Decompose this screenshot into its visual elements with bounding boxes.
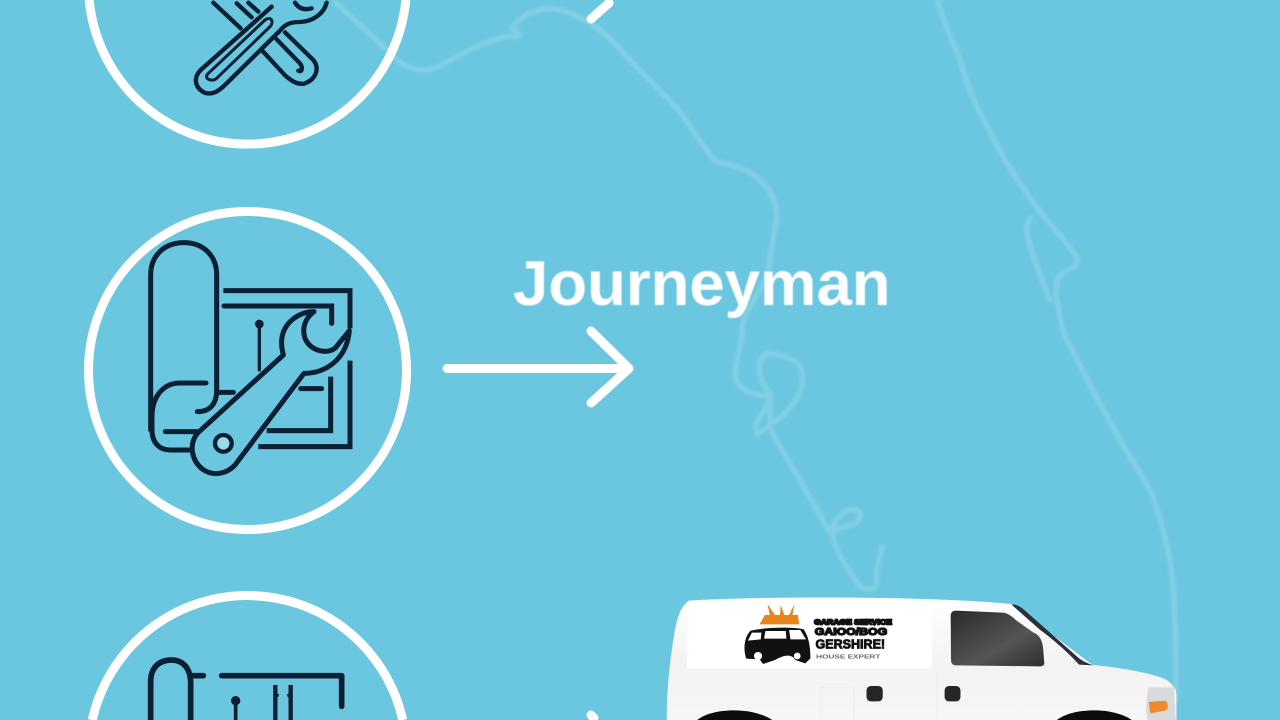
logo panel xyxy=(687,606,932,668)
windshield strip xyxy=(1012,605,1093,665)
door handles xyxy=(867,686,883,701)
circle ring xyxy=(88,212,406,530)
van body xyxy=(667,597,1176,720)
arrow: top stage xyxy=(591,3,609,19)
side window xyxy=(951,611,1044,666)
icon: crossed wrench and screwdriver xyxy=(196,3,327,93)
wrench xyxy=(192,312,349,474)
map outline: faint state border xyxy=(335,2,1176,700)
circle ring xyxy=(89,0,406,144)
logo text: GERSHIRE! xyxy=(815,636,885,651)
door seams xyxy=(821,670,937,720)
logo text: GAIOO/BOG xyxy=(815,627,887,638)
van xyxy=(667,597,1176,720)
icon: blueprint roll with tools xyxy=(151,660,342,720)
arrow: bottom stage xyxy=(591,715,594,718)
heading: Journeyman: Journeyman xyxy=(513,249,891,319)
circle ring xyxy=(92,596,403,720)
headlight xyxy=(1146,687,1176,720)
logo text xyxy=(814,618,892,661)
logo text: GARAGE SERVICE xyxy=(814,618,892,627)
panel: bottom stage circle with blueprint and tools xyxy=(92,596,403,720)
logo text: HOUSE EXPERT xyxy=(816,655,882,661)
logo: van with orange crest xyxy=(744,604,810,664)
arrow: middle stage xyxy=(447,331,629,403)
icon: blueprint roll and wrench xyxy=(151,243,350,474)
wheel arches xyxy=(697,710,772,720)
panel: top stage circle with crossed tools xyxy=(89,0,406,144)
panel: middle stage circle with blueprint and wrench xyxy=(88,212,406,530)
